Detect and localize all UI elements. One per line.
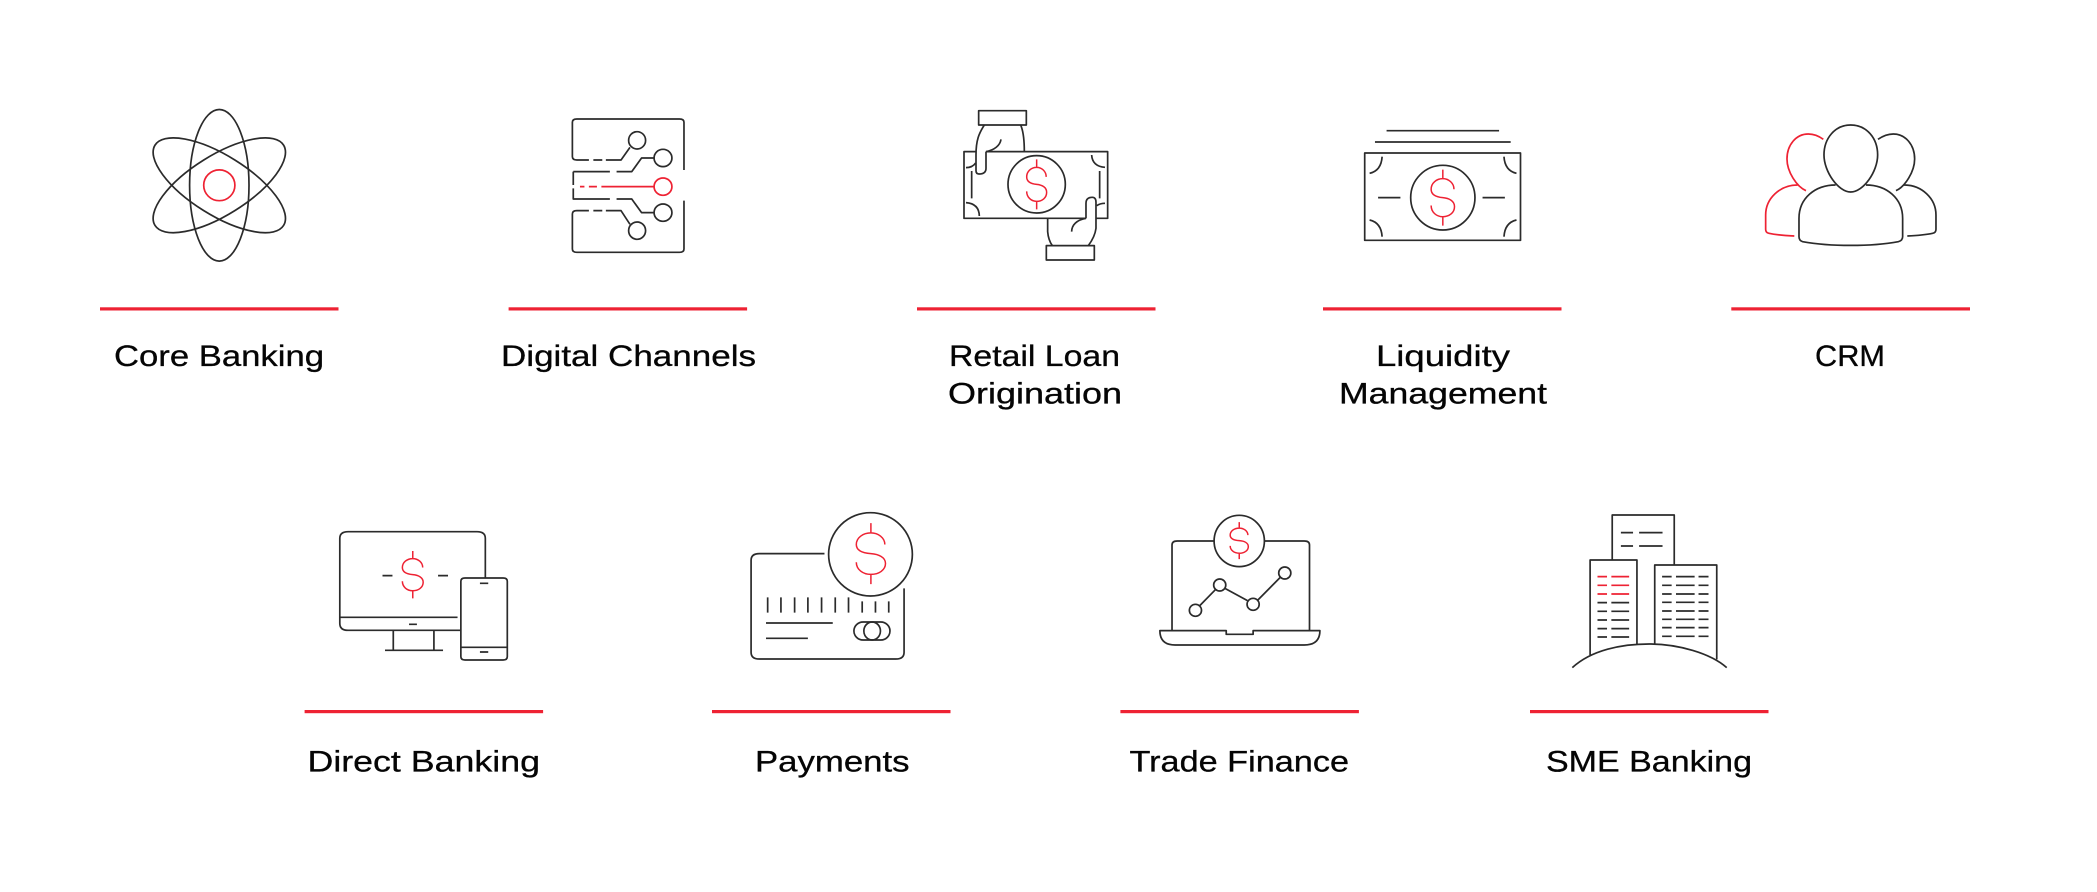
panel: Liquidity Management <box>1323 131 1562 410</box>
label: Retail Loan Origination: Origination <box>948 378 1122 410</box>
panel: CRM <box>1731 125 1970 373</box>
divider: Core Banking <box>100 307 338 310</box>
label: Retail Loan Origination: Retail Loan <box>949 340 1120 373</box>
divider: Digital Channels <box>509 307 747 310</box>
icon: hands exchanging banknote <box>964 111 1108 260</box>
label: Liquidity Management: Liquidity <box>1376 340 1510 373</box>
divider: Trade Finance <box>1120 710 1359 713</box>
dollar sign <box>1027 159 1047 209</box>
panel: Trade Finance <box>1120 515 1359 779</box>
dollar sign <box>1431 170 1455 226</box>
panel: Digital Channels <box>501 119 756 373</box>
icon: desktop and phone <box>340 532 507 660</box>
label: Payments: Payments <box>755 746 910 779</box>
panel: Retail Loan Origination <box>917 111 1156 410</box>
divider: Direct Banking <box>305 710 543 713</box>
divider: Payments <box>712 710 950 713</box>
divider: Liquidity Management <box>1323 307 1562 310</box>
icon: atom <box>139 110 299 261</box>
label: CRM: CRM <box>1815 340 1885 373</box>
icon: office buildings <box>1572 515 1727 668</box>
icon: laptop with chart <box>1160 515 1320 645</box>
label: Direct Banking: Direct Banking <box>308 746 540 779</box>
icon: circuit channels <box>572 119 684 252</box>
dollar sign <box>1230 522 1248 559</box>
label: Liquidity Management: Management <box>1339 378 1548 410</box>
panel: Payments <box>712 513 950 779</box>
icon: credit card with coin <box>751 513 912 659</box>
dollar sign <box>856 523 885 584</box>
label: Digital Channels: Digital Channels <box>501 340 756 373</box>
divider: Retail Loan Origination <box>917 307 1156 310</box>
panel: SME Banking <box>1530 515 1768 779</box>
icon: banknote <box>1365 131 1520 240</box>
dollar sign <box>402 551 423 598</box>
label: Trade Finance: Trade Finance <box>1130 746 1349 779</box>
divider: CRM <box>1731 307 1970 310</box>
panel: Core Banking <box>100 110 338 373</box>
icon: three people <box>1766 125 1936 245</box>
label: SME Banking: SME Banking <box>1546 746 1752 779</box>
panel: Direct Banking <box>305 532 543 779</box>
divider: SME Banking <box>1530 710 1768 713</box>
label: Core Banking: Core Banking <box>114 340 324 373</box>
